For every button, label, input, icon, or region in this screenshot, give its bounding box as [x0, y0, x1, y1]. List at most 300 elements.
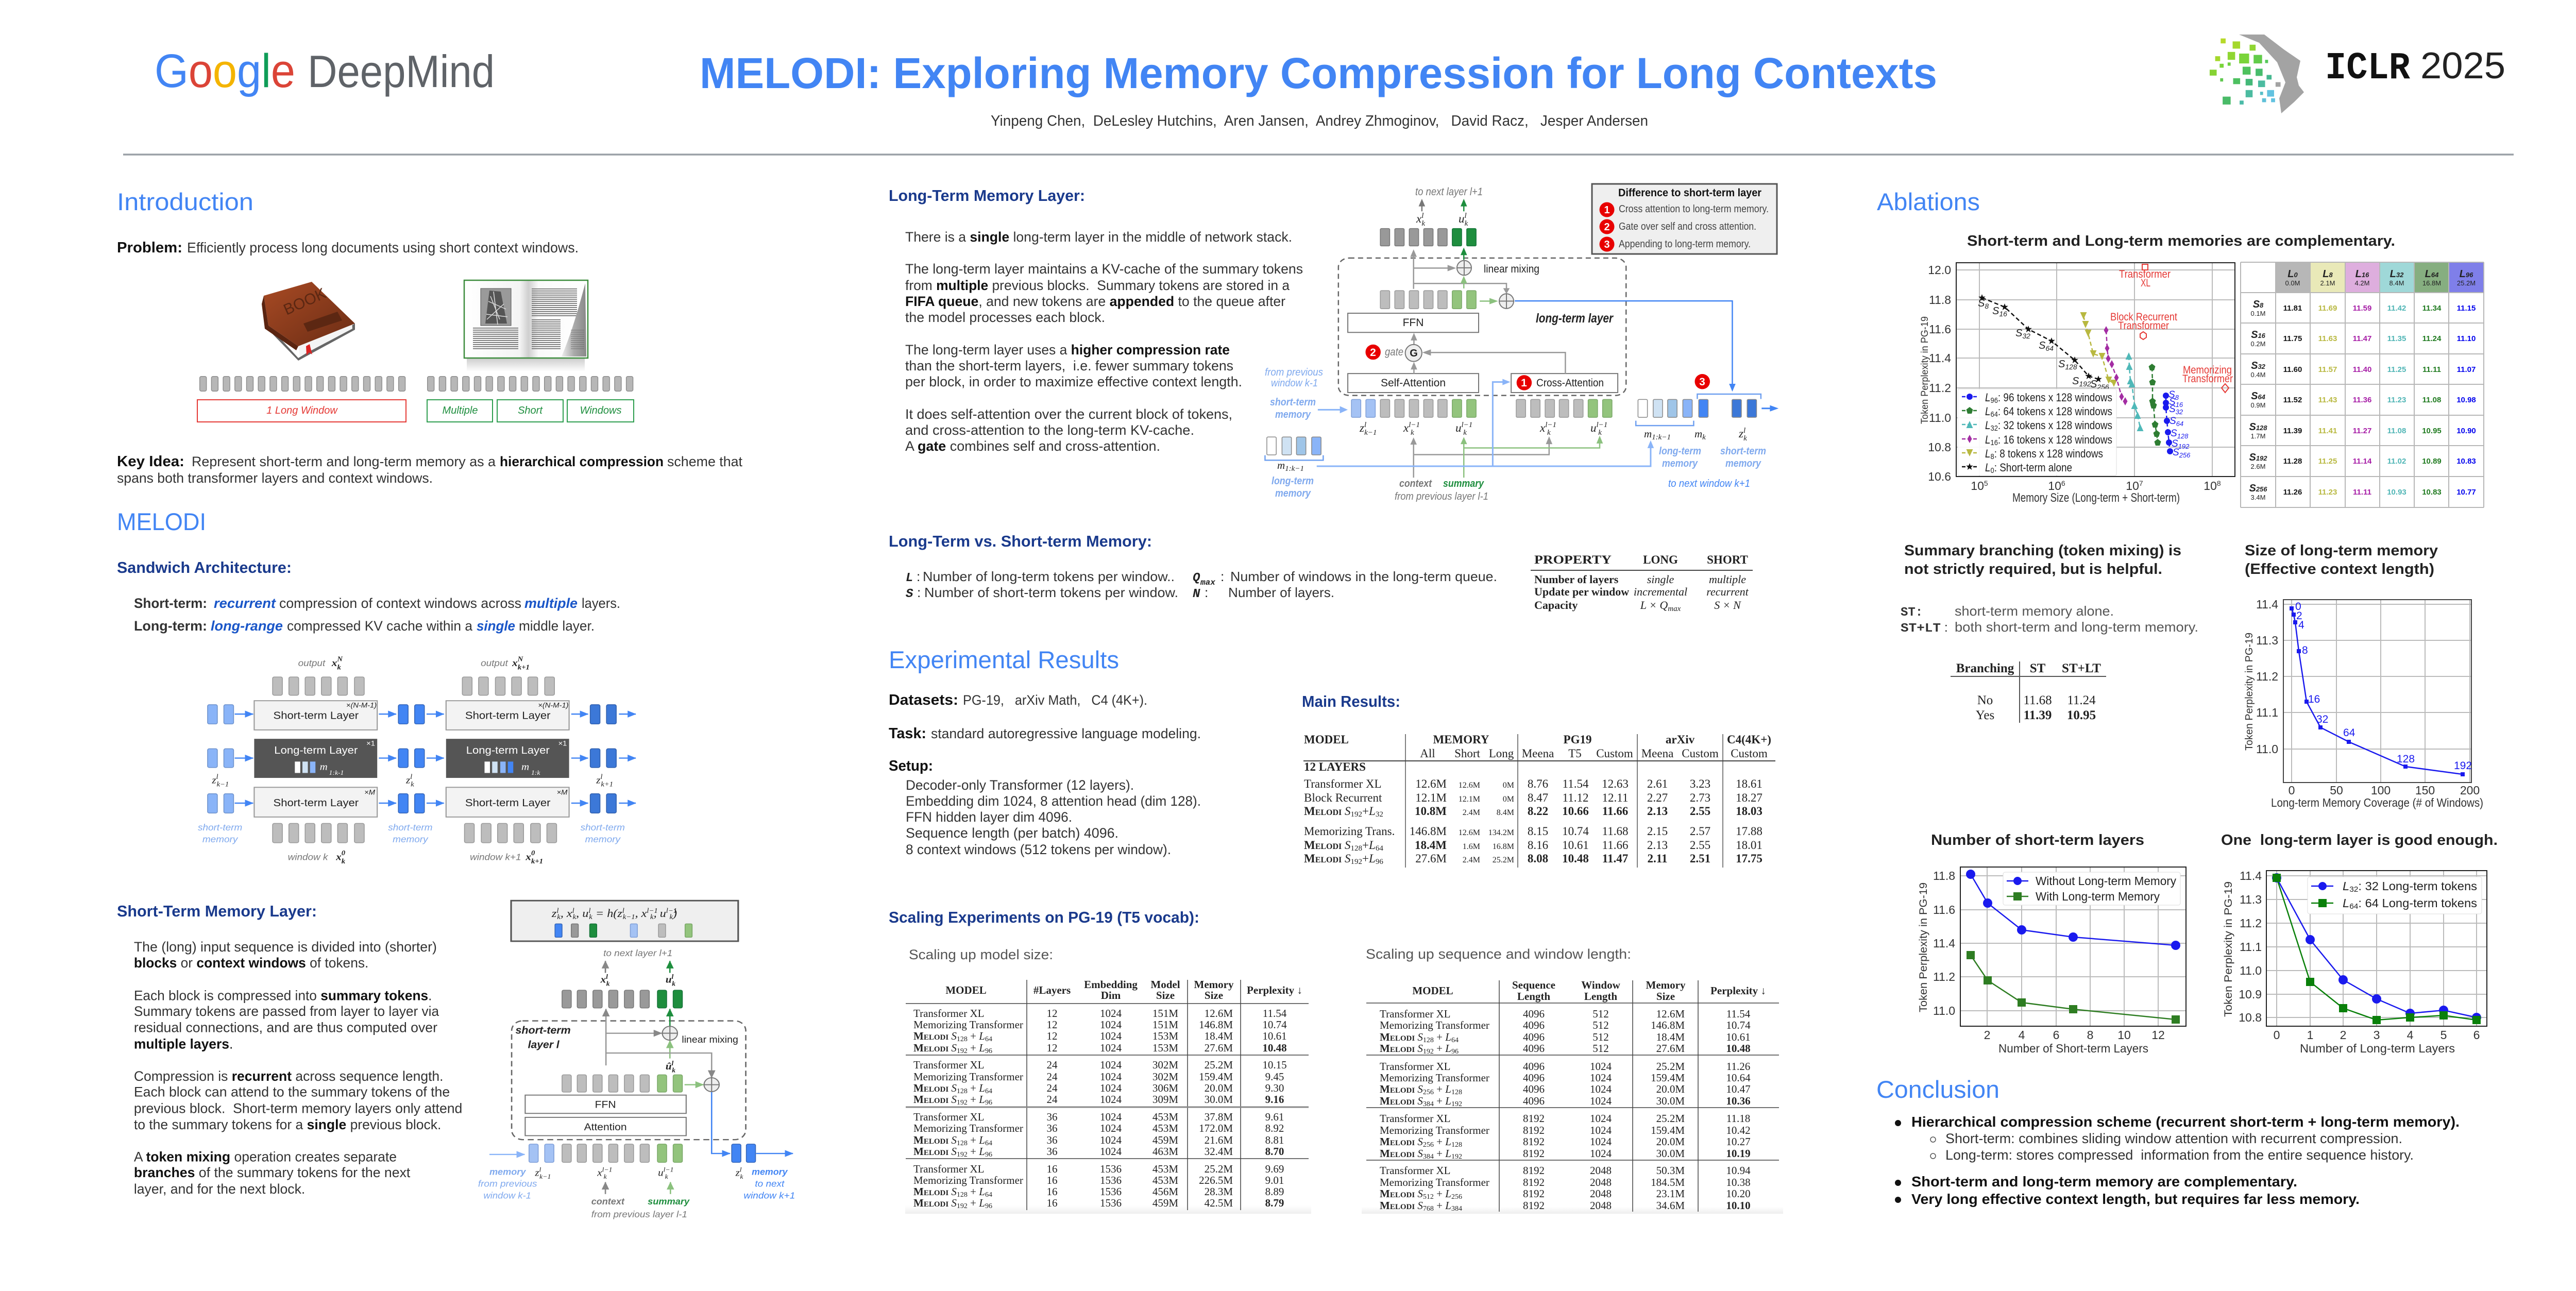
labels: output and window: [198, 655, 625, 865]
diagram labels: l: [672, 973, 674, 980]
layer labels: Long-term Layer: [274, 745, 358, 756]
table: scaling sequence and window: L: [1445, 1095, 1451, 1107]
table: scaling model size: 25.2M: [1205, 1059, 1233, 1071]
legend: L: [1985, 391, 1991, 404]
table: scaling sequence and window: 10.19: [1726, 1147, 1751, 1160]
table: scaling sequence and window: Melodi: [1380, 1135, 1415, 1148]
formula box: k: [557, 913, 561, 921]
table: branching: 11.24: [2067, 693, 2096, 707]
table: property comparison: Capacity: [1534, 599, 1578, 611]
table: main results: 10.74: [1562, 825, 1589, 838]
point labels: 16: [2176, 401, 2183, 409]
chart: number of short-term layers: 4: [2019, 1028, 2025, 1042]
heading: summary branching: [1904, 542, 2181, 577]
table: perplexity heat grid: 11.15: [2457, 304, 2476, 313]
table: property comparison: Update per window: [1534, 585, 1629, 598]
table: scaling sequence and window: 1024: [1590, 1095, 1612, 1107]
table: perplexity heat grid: 11.43: [2318, 396, 2337, 404]
diagram labels: long-term: [1272, 475, 1314, 487]
long-term memory tokens: 1:k-1: [329, 769, 344, 776]
table: scaling sequence and window: 1024: [1590, 1112, 1612, 1125]
table: main results: 10.61: [1562, 839, 1589, 852]
chart: number of short-term layers: Token Perplexity in PG-19: [1918, 882, 1929, 1012]
table: perplexity heat grid: S32: [2251, 360, 2266, 371]
table: scaling sequence and window: MODEL: [1412, 984, 1453, 997]
table: perplexity heat grid: 11.02: [2387, 457, 2406, 466]
diagram labels: k: [740, 1173, 743, 1180]
diagram labels: k: [672, 980, 676, 987]
table: scaling model size: 172.0M: [1199, 1122, 1233, 1134]
chart: number of long-term layers: Number of Long-term Layers: [2300, 1042, 2455, 1055]
text: definitions: Number of long-term tokens per window..: [923, 569, 1175, 584]
diagram labels: 1:k−1: [1652, 433, 1671, 441]
text: short-term and long-term summary: recurrent: [214, 596, 276, 611]
table: perplexity heat grid: 11.26: [2283, 488, 2302, 497]
table: perplexity heat grid: 11.57: [2318, 365, 2337, 374]
tokens: input row: [529, 1144, 755, 1162]
arrows: memory flow: [235, 714, 636, 803]
labels: output and window: memory: [393, 835, 429, 844]
table: scaling model size: L: [978, 1197, 985, 1209]
diagram labels: l: [740, 1166, 742, 1173]
chart: number of long-term layers: 10.8: [2239, 1011, 2262, 1024]
text: datasets, task, setup: [889, 692, 1201, 857]
table: main results: 11.68: [1602, 825, 1628, 838]
table: scaling sequence and window: S: [1417, 1095, 1423, 1107]
table: property comparison: recurrent: [1706, 585, 1749, 598]
chart: long-term memory coverage: 192: [2454, 760, 2472, 772]
labels: output and window: memory: [202, 835, 238, 844]
chart: number of short-term layers: [1918, 867, 2186, 1055]
table: main results: 64: [1376, 844, 1383, 853]
chart: long-term memory coverage: 11.3: [2256, 634, 2278, 647]
text: short-term memory layer description: Summary tokens are passed from layer to layer via: [134, 1004, 439, 1019]
table: scaling model size: Melodi: [913, 1145, 948, 1158]
table: scaling model size: 192: [957, 1202, 968, 1210]
legend: 8: [1991, 452, 1994, 461]
chart: long-term memory coverage: 11.2: [2256, 670, 2278, 683]
logo text: 2025: [2420, 45, 2505, 87]
list: conclusions: Long-term: stores compressed information from the entire sequence history.: [1945, 1147, 2414, 1163]
chart: number of long-term layers: 11.4: [2240, 869, 2262, 882]
table: property comparison: PROPERTY: [1534, 553, 1612, 566]
table: scaling sequence and window: Melodi: [1380, 1199, 1415, 1212]
logo: Google DeepMind: [155, 45, 495, 97]
text: problem: Efficiently process long documents using short context windows.: [187, 240, 579, 256]
table: scaling sequence and window: +: [1434, 1083, 1445, 1095]
chart: number of short-term layers: 11.2: [1933, 970, 1955, 983]
boxes: multiple short windows: [427, 400, 634, 422]
text: short-term memory layer description: Compression is recurrent across sequence length.: [134, 1068, 444, 1084]
table: main results: 8.22: [1528, 805, 1548, 818]
table: scaling sequence and window: S: [1417, 1135, 1423, 1148]
table: scaling model size: S: [951, 1134, 957, 1146]
table: main results: Short: [1454, 747, 1481, 760]
point labels: 256: [2096, 383, 2109, 391]
table: scaling sequence and window: 8192: [1523, 1199, 1545, 1212]
table: scaling model size: 1024: [1100, 1093, 1122, 1106]
labels: output and window: l: [410, 773, 412, 781]
table: main results: L: [1368, 839, 1376, 852]
point labels: S: [2172, 438, 2178, 449]
table: scaling sequence and window: Melodi: [1380, 1095, 1415, 1107]
text: definitions: Number of short-term tokens per window.: [924, 585, 1178, 600]
axes labels: 11.0: [1929, 411, 1951, 424]
labels: output and window: k+1: [531, 858, 543, 865]
table: perplexity heat grid: S8: [2253, 299, 2264, 310]
tokens: output: [273, 677, 554, 695]
text: datasets, task, setup: Decoder-only Transformer (12 layers).: [906, 777, 1134, 793]
axes labels: Token Perplexity in PG-19: [1920, 316, 1930, 424]
formula box: , u: [654, 907, 666, 920]
table: scaling model size: 128: [957, 1088, 968, 1095]
text: key idea: Represent short-term and long-term memory as a: [192, 454, 496, 469]
table: scaling sequence and window: Sequence: [1512, 979, 1555, 991]
table: scaling sequence and window: Transformer XL: [1380, 1060, 1450, 1073]
boxes: multiple short windows: Short: [518, 405, 543, 416]
table: branching: ST: [2030, 661, 2046, 675]
diagram labels: u: [1455, 421, 1461, 434]
diagram labels: k: [665, 1173, 668, 1180]
diagram labels: memory: [752, 1167, 788, 1177]
table: main results: 10.66: [1562, 805, 1589, 818]
long-term memory tokens: 1:k: [531, 769, 540, 776]
legend: L: [1985, 419, 1991, 432]
text: datasets, task, setup: Setup:: [889, 758, 933, 774]
table: scaling sequence and window: 10.20: [1726, 1187, 1751, 1200]
diagram labels: 1:k−1: [1285, 465, 1304, 473]
chart: long-term memory coverage: Token Perplexity in PG-19: [2244, 633, 2255, 751]
diagram labels: z: [1360, 421, 1364, 434]
table: main results: 192: [1351, 810, 1362, 819]
table: scaling sequence and window: 10.10: [1726, 1199, 1751, 1212]
reference labels: [2110, 268, 2233, 385]
diagram labels: short-term: [1270, 397, 1316, 408]
table: perplexity heat grid: L32: [2390, 268, 2404, 280]
diagram labels: k: [1463, 429, 1467, 437]
boxes: multiple short windows: Multiple: [443, 405, 478, 416]
table: perplexity heat grid: 11.36: [2353, 396, 2371, 404]
chart: number of short-term layers: Number of Short-term Layers: [1998, 1042, 2148, 1055]
table: main results: MEMORY: [1433, 733, 1489, 746]
legend: 32: [2349, 885, 2358, 894]
reference models: [2140, 264, 2229, 393]
diagram labels: memory: [1275, 409, 1311, 420]
chart: number of short-term layers: 10: [2117, 1028, 2131, 1042]
table: main results: 2.55: [1690, 805, 1710, 818]
diagram labels: layer l: [528, 1039, 560, 1050]
chart: long-term memory coverage: [2244, 598, 2483, 809]
text: short-term and long-term summary: layers.: [582, 596, 620, 611]
table: scaling sequence and window: 10.61: [1726, 1031, 1751, 1043]
table: scaling model size: 12: [1047, 1007, 1057, 1020]
point labels: S: [2169, 397, 2176, 407]
table: main results: 12 LAYERS: [1304, 760, 1366, 773]
series: L96: [2163, 393, 2173, 454]
table: scaling model size: 1536: [1100, 1197, 1122, 1209]
table: main results: 12.63: [1602, 777, 1629, 790]
diagram labels: k: [604, 1173, 607, 1180]
text: short-term memory layer description: branches of the summary tokens for the next: [134, 1165, 411, 1180]
table: main results: 18.01: [1736, 839, 1762, 852]
chart: number of long-term layers: 4: [2407, 1028, 2414, 1042]
table: scaling model size: Melodi: [913, 1134, 948, 1146]
legend: : 32 tokens x 128 windows: [1998, 419, 2112, 432]
panel: Long-Term Memory Layer: [889, 184, 1778, 502]
table: scaling sequence and window: Melodi: [1380, 1031, 1415, 1043]
chart: long-term memory coverage: 2: [2296, 610, 2302, 622]
text: long-term description: per block, in order to maximize effective context length.: [905, 374, 1242, 389]
text: long-term description: [905, 229, 1303, 454]
formula box: z: [552, 907, 556, 920]
table: scaling model size: 456M: [1153, 1185, 1178, 1198]
table: scaling sequence and window: 10.36: [1726, 1095, 1751, 1107]
table: main results: Meena: [1641, 747, 1673, 760]
diagram labels: memory: [1725, 458, 1761, 469]
table: main results: All: [1420, 747, 1435, 760]
reference labels: Transformer: [2118, 320, 2169, 332]
table: scaling model size: L: [978, 1082, 985, 1094]
tokens: short windows: [427, 376, 634, 392]
table: scaling model size: 12: [1047, 1042, 1057, 1054]
table: scaling model size: 8.92: [1265, 1122, 1284, 1134]
chart: number of short-term layers: 11.4: [1933, 937, 1955, 950]
text: short-term and long-term summary: Short-term:: [134, 596, 207, 611]
layer labels: Long-term Layer: [466, 745, 550, 756]
diagram labels: memory: [1662, 458, 1698, 469]
legend: : 8 tokens x 128 windows: [1994, 447, 2103, 460]
diagram labels: l: [672, 1060, 674, 1067]
diagram labels: l−1: [602, 1166, 612, 1173]
table: perplexity heat grid: 10.83: [2422, 488, 2442, 497]
text: datasets, task, setup: 8 context windows (512 tokens per window).: [906, 842, 1171, 857]
table: scaling sequence and window: 64: [1451, 1037, 1459, 1044]
chart: long-term memory coverage: 128: [2397, 753, 2415, 765]
diagram labels: summary: [648, 1197, 690, 1207]
table: perplexity heat grid: 11.47: [2353, 334, 2371, 343]
labels: output and window: k: [337, 664, 341, 671]
table: scaling sequence and window: S: [1417, 1187, 1423, 1200]
heading: long-term vs short-term: Long-Term vs. Short-term Memory:: [889, 532, 1152, 550]
table: scaling sequence and window: 34.6M: [1656, 1199, 1685, 1212]
list: conclusions: Hierarchical compression scheme (recurrent short-term + long-term memory).: [1911, 1114, 2460, 1130]
text: short-term memory layer description: multiple layers.: [134, 1037, 233, 1051]
chart: long-term memory coverage: 64: [2343, 727, 2355, 739]
table: scaling model size: 12: [1047, 1018, 1057, 1031]
diagram labels: l−1: [1596, 421, 1607, 429]
diagram labels: from previous: [478, 1179, 537, 1188]
table: scaling sequence and window: 192: [1451, 1100, 1462, 1108]
table: perplexity heat grid: S16: [2251, 329, 2266, 341]
logo: ICLR 2025: [2210, 35, 2505, 113]
table: main results: 134.2M: [1488, 828, 1514, 837]
table: main results: 8.4M: [1497, 808, 1514, 817]
text: datasets, task, setup: PG-19, arXiv Math, C4 (4K+).: [963, 692, 1147, 708]
axes labels: 7: [2139, 479, 2143, 487]
table: scaling sequence and window: Melodi: [1380, 1187, 1415, 1200]
diagram labels: Cross-Attention: [1536, 377, 1604, 389]
diagram labels: from previous layer l-1: [1395, 491, 1488, 502]
text: ST definitions: ST+LT: [1901, 622, 1941, 636]
point labels: 16: [1999, 310, 2007, 318]
text: ST definitions: both short-term and long-term memory.: [1955, 619, 2198, 635]
text: long-term description: It does self-attention over the current block of tokens,: [905, 406, 1232, 422]
table: scaling model size: Melodi: [913, 1082, 948, 1094]
axes labels: 10: [1971, 479, 1984, 492]
table: scaling sequence and window: 27.6M: [1656, 1042, 1685, 1055]
chart: number of long-term layers: 11.1: [2240, 940, 2262, 954]
table: scaling sequence and window: 2048: [1590, 1187, 1612, 1200]
table: property comparison: incremental: [1634, 585, 1687, 598]
table: main results: 192: [1351, 858, 1362, 866]
table: scaling model size: 18.4M: [1205, 1030, 1233, 1042]
diagram labels: to next window k+1: [1668, 478, 1750, 489]
labels: output and window: short-term: [388, 823, 432, 833]
table: main results: 2.4M: [1463, 808, 1480, 817]
diagram labels: l: [606, 973, 608, 980]
table: scaling sequence and window: 8192: [1523, 1124, 1545, 1136]
table: scaling sequence and window: 25.2M: [1656, 1112, 1685, 1125]
labels: output and window: k+1: [518, 664, 530, 671]
diagram: sandwich architecture: [198, 655, 636, 865]
table: perplexity heat grid: 11.81: [2283, 304, 2302, 313]
diagram labels: short-term: [515, 1025, 571, 1036]
text: short-term memory layer description: The (long) input sequence is divided into (shorter): [134, 939, 437, 955]
table: scaling sequence and window: 10.38: [1726, 1176, 1751, 1188]
table: scaling model size: 1024: [1100, 1042, 1122, 1054]
table: perplexity heat grid: 4.2M: [2355, 279, 2369, 287]
table: scaling model size: 453M: [1153, 1122, 1178, 1134]
heading: size of long-term memory: [2245, 542, 2438, 577]
text: definitions: :: [917, 585, 921, 600]
table: scaling sequence and window: 512: [1423, 1193, 1434, 1201]
table: perplexity heat grid: 2.1M: [2320, 279, 2335, 287]
table: main results: 12.6M: [1459, 828, 1480, 837]
labels: output and window: z: [212, 775, 216, 786]
labels: output and window: N: [517, 655, 523, 663]
series: L64: [2148, 364, 2161, 446]
text: short-term and long-term summary: Long-term:: [134, 618, 207, 634]
diagram labels: summary: [1443, 478, 1484, 489]
heading: Short-Term Memory Layer: Short-Term Memory Layer:: [117, 902, 317, 920]
table: branching: 10.95: [2067, 708, 2096, 722]
table: scaling sequence and window: 2048: [1590, 1176, 1612, 1188]
text: definitions: :: [1205, 585, 1208, 600]
point labels: 128: [2177, 432, 2189, 440]
table: scaling sequence and window: 384: [1423, 1153, 1434, 1161]
table: scaling sequence and window: Melodi: [1380, 1042, 1415, 1055]
point labels: [1978, 298, 2191, 459]
table: main results: 146.8M: [1410, 825, 1447, 838]
reference labels: Transformer: [2119, 268, 2171, 280]
diagram labels: k: [606, 980, 610, 987]
legend: 64: [2349, 902, 2358, 911]
table: main results: 11.54: [1563, 777, 1589, 790]
table: perplexity heat grid: 11.23: [2387, 396, 2406, 404]
logo text: ICLR: [2325, 47, 2411, 90]
table: scaling model size: 1024: [1100, 1145, 1122, 1158]
diagram labels: z: [535, 1167, 539, 1178]
long-term memory tokens: m: [320, 761, 328, 772]
table: scaling model size: L: [978, 1093, 985, 1106]
table: main results: 12.6M: [1415, 777, 1447, 790]
table: scaling sequence and window: Memorizing Transformer: [1380, 1124, 1489, 1136]
axes labels: 10.8: [1928, 440, 1951, 454]
table: scaling sequence and window: L: [1445, 1135, 1451, 1148]
table: main results: 10.48: [1562, 852, 1589, 865]
diagram labels: Self-Attention: [1381, 377, 1446, 389]
table: scaling sequence and window: 192: [1451, 1153, 1462, 1161]
chart: number of long-term layers: [2223, 869, 2487, 1055]
text: definitions: [906, 569, 1497, 601]
labels: output and window: output: [298, 658, 326, 668]
table: main results: 17.75: [1736, 852, 1762, 865]
text: definitions: N: [1193, 587, 1200, 601]
table: perplexity heat grid: 3.4M: [2251, 494, 2265, 501]
labels: output and window: l: [216, 773, 218, 781]
table: scaling model size: Memory: [1194, 978, 1234, 991]
labels: output and window: N: [336, 655, 343, 663]
formula box: k: [650, 913, 654, 921]
diagram labels: z: [1739, 427, 1743, 440]
table: scaling sequence and window: 18.4M: [1656, 1031, 1685, 1043]
table: scaling model size: 12.6M: [1205, 1007, 1233, 1020]
text: definitions: L: [906, 571, 913, 585]
table: branching: ST+LT: [2062, 661, 2101, 675]
table: perplexity heat grid: 0.9M: [2251, 401, 2265, 409]
table: scaling sequence and window: 10.47: [1726, 1083, 1751, 1095]
table: perplexity heat grid: 11.39: [2283, 427, 2302, 435]
labels: output and window: short-term: [581, 823, 625, 833]
table: scaling model size: 9.30: [1265, 1082, 1284, 1094]
table: scaling model size: 36: [1047, 1145, 1057, 1158]
boxes: FFN and attention: FFN: [595, 1099, 616, 1110]
formula box: , x: [561, 907, 572, 920]
diagram labels: k: [1598, 429, 1602, 437]
table: scaling model size: Memorizing Transformer: [913, 1174, 1023, 1186]
table: perplexity heat grid: 0.1M: [2251, 310, 2265, 317]
table: main results: 0M: [1503, 795, 1514, 804]
table: perplexity heat grid: 11.07: [2457, 365, 2476, 374]
chart: long-term memory coverage: 32: [2316, 714, 2328, 725]
diagram labels: window k-1: [1271, 378, 1318, 389]
table: scaling model size: 302M: [1153, 1071, 1178, 1083]
diagram labels: k: [1411, 429, 1414, 437]
table: scaling model size: 96: [985, 1099, 992, 1107]
table: scaling model size: 10.48: [1262, 1042, 1287, 1054]
diagram labels: u: [1590, 421, 1596, 434]
table: scaling sequence and window: 8192: [1523, 1164, 1545, 1177]
table: scaling sequence and window: S: [1417, 1031, 1423, 1043]
diagram labels: u: [666, 974, 672, 985]
table: scaling model size: 306M: [1153, 1082, 1178, 1094]
panel: MELODI: [117, 508, 795, 1219]
text: short-term memory layer description: Each block is compressed into summary tokens.: [134, 988, 432, 1003]
text: short-term memory layer description: blocks or context windows of tokens.: [134, 955, 368, 971]
table: scaling model size: 27.6M: [1205, 1042, 1233, 1054]
table: main results: 10.8M: [1415, 805, 1447, 818]
table: perplexity heat grid: 11.23: [2318, 488, 2337, 497]
table: main results: Melodi: [1304, 839, 1342, 852]
chart: number of short-term layers: 2: [1984, 1028, 1990, 1042]
diagram labels: l−1: [1545, 421, 1556, 429]
legend: [1958, 389, 2116, 475]
text: datasets, task, setup: Datasets:: [889, 692, 958, 708]
table: scaling model size: MODEL: [945, 984, 987, 996]
list: conclusions: Short-term: combines sliding window attention with recurrent compression.: [1945, 1131, 2402, 1146]
table: main results: 8.16: [1528, 839, 1548, 852]
diagram labels: memory: [489, 1167, 526, 1177]
